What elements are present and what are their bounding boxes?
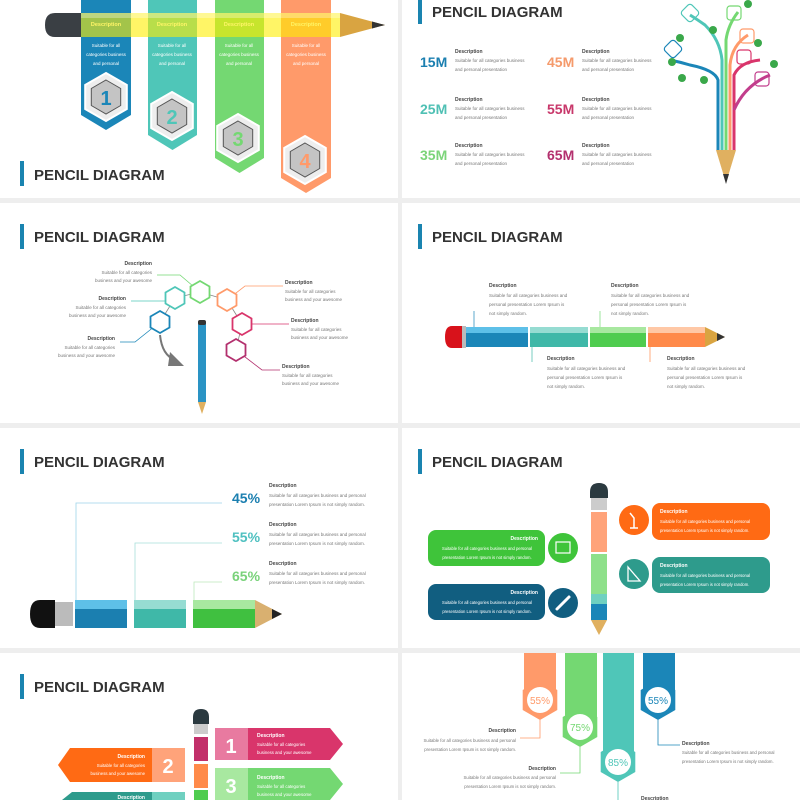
texts panel 8: presentation Lorem Ipsum is not simply random. [682, 759, 774, 764]
texts panel 3: Suitable for all categories [282, 373, 333, 378]
ribbon 3 green [215, 0, 264, 173]
stat 35M: and personal presentation [455, 161, 508, 166]
ribbon 2 teal: categories business [152, 52, 193, 57]
box orange: Description [660, 509, 688, 515]
stat 15M: 15M [420, 54, 447, 70]
pencil horizontal [45, 13, 385, 37]
texts panel 4: Description [547, 356, 575, 362]
ribbon 2 teal: Description [157, 22, 188, 28]
tag 1 pink: business and your awesome [257, 750, 312, 755]
texts panel 8: Suitable for all categories business and personal [682, 750, 774, 755]
texts panel 3: business and your awesome [291, 335, 349, 340]
texts panel 3: business and your awesome [58, 353, 115, 358]
ribbons [524, 653, 675, 752]
stat 25M: and personal presentation [455, 115, 508, 120]
stat 25M [420, 97, 525, 120]
stat 55M: and personal presentation [582, 115, 635, 120]
texts panel 8 [424, 728, 774, 800]
texts panel 3: Description [124, 261, 152, 267]
title panel 5 [20, 449, 165, 474]
title panel 4: PENCIL DIAGRAM [432, 229, 563, 246]
texts panel 4: personal presentation Lorem Ipsum is [611, 302, 687, 307]
texts panel 5: presentation Lorem Ipsum is not simply random. [269, 502, 365, 507]
texts panel 5: presentation Lorem Ipsum is not simply random. [269, 580, 365, 585]
ribbon 4 orange: categories business [286, 52, 327, 57]
vertical blue pencil [198, 320, 206, 414]
ribbon 3 green: Suitable for all [225, 43, 253, 48]
box dark blue: Suitable for all categories business and personal [442, 600, 532, 605]
vertical pencil [193, 709, 209, 800]
hexagon 4: 4 [299, 151, 311, 173]
texts panel 3: business and your awesome [282, 381, 340, 386]
hexagon 2 [151, 92, 193, 140]
texts panel 4: Suitable for all categories business and [667, 366, 746, 371]
ribbon 3 green: and personal [226, 61, 252, 66]
texts panel 4: Description [489, 283, 517, 289]
ribbon 3 green: Description [224, 22, 255, 28]
title panel 4 [418, 224, 563, 249]
texts panel 3: Description [98, 296, 126, 302]
stat 55M: 55M [547, 101, 574, 117]
stat 15M [420, 49, 525, 72]
hexagon 2: 2 [166, 107, 178, 129]
title panel 7: PENCIL DIAGRAM [34, 679, 165, 696]
texts panel 3: Description [285, 280, 313, 286]
texts panel 4: personal presentation Lorem Ipsum is [489, 302, 565, 307]
ribbon 3 green: categories business [219, 52, 260, 57]
box dark blue: Description [510, 590, 538, 596]
hex 85% teal [601, 742, 635, 782]
tag 3 green [215, 768, 343, 800]
ribbon 1 blue: Suitable for all [92, 43, 120, 48]
hex icons [150, 281, 252, 361]
texts panel 4 [489, 283, 746, 389]
box dark blue [428, 584, 545, 620]
stat 65M: Suitable for all categories business [582, 152, 652, 157]
percentages [232, 490, 261, 584]
hexagon 3 [217, 114, 259, 162]
title panel 5: PENCIL DIAGRAM [34, 454, 165, 471]
texts panel 4: personal presentation Lorem Ipsum is [667, 375, 743, 380]
ribbon 1 blue [81, 0, 131, 130]
texts panel 3 [58, 261, 349, 386]
texts panel 5: Description [269, 561, 297, 567]
ribbon 1 blue: and personal [93, 61, 119, 66]
texts panel 4: not simply random. [611, 311, 649, 316]
texts panel 8: Description [682, 741, 710, 747]
texts panel 3: Description [291, 318, 319, 324]
panel 1: ribbons pencil [0, 0, 398, 198]
stat 35M: 35M [420, 147, 447, 163]
hexagon 1 [85, 73, 127, 121]
box teal: presentation Lorem Ipsum is not simply random. [660, 582, 749, 587]
texts panel 5: Suitable for all categories business and personal [269, 532, 366, 537]
hex 55% blue [641, 680, 675, 720]
hex 55% orange [523, 680, 557, 720]
tag 1 pink: Description [257, 733, 285, 739]
tag 4 teal [62, 792, 185, 800]
title panel 1: PENCIL DIAGRAM [34, 167, 165, 184]
texts panel 3: Suitable for all categories [291, 327, 342, 332]
box orange: Suitable for all categories business and personal [660, 519, 750, 524]
icon circles [548, 505, 649, 618]
box green: presentation Lorem Ipsum is not simply random. [442, 555, 532, 560]
ribbon 2 teal: and personal [159, 61, 185, 66]
stat 45M: and personal presentation [582, 67, 635, 72]
hexagon 4 [284, 136, 326, 184]
hex 75% green [563, 707, 597, 747]
box teal: Suitable for all categories business and personal [660, 573, 750, 578]
panel 7: numbered arrow tags [0, 653, 398, 800]
ribbon 4 orange: and personal [293, 61, 319, 66]
texts panel 8: presentation Lorem Ipsum is not simply random. [424, 747, 516, 752]
panel 8: hanging hexagon percentages [402, 653, 800, 800]
percentages: 65% [232, 568, 261, 584]
panel 3: hexagon chain [0, 203, 398, 423]
ribbon 4 orange: Suitable for all [292, 43, 320, 48]
texts panel 5: Suitable for all categories business and personal [269, 571, 366, 576]
stat 15M: Description [455, 49, 483, 55]
box green [428, 530, 545, 566]
stat 25M: 25M [420, 101, 447, 117]
stat 45M: Description [582, 49, 610, 55]
vertical pencil [590, 483, 608, 635]
stat 45M [547, 49, 652, 72]
hexagon 3: 3 [232, 129, 244, 151]
title panel 7 [20, 674, 165, 699]
stat 35M: Description [455, 143, 483, 149]
texts panel 3: Suitable for all categories [75, 305, 127, 310]
tag 3 green: Suitable for all categories [257, 784, 305, 789]
percentages: 45% [232, 490, 261, 506]
texts panel 5: Description [269, 522, 297, 528]
stat 65M: and personal presentation [582, 161, 635, 166]
texts panel 4: Suitable for all categories business and [547, 366, 626, 371]
box green: Suitable for all categories business and personal [442, 546, 532, 551]
texts panel 3: Description [87, 336, 115, 342]
stat 65M: Description [582, 143, 610, 149]
tag 1 pink: Suitable for all categories [257, 742, 305, 747]
texts panel 4: personal presentation Lorem Ipsum is [547, 375, 623, 380]
leader lines [520, 720, 680, 800]
tag 3 green: 3 [225, 776, 237, 798]
texts panel 8: Suitable for all categories business and personal [424, 738, 516, 743]
texts panel 3: business and your awesome [69, 313, 126, 318]
leader lines [76, 503, 222, 600]
curved arrow [160, 335, 184, 366]
panel 5: percentage pencil [0, 428, 398, 648]
title panel 2 [418, 0, 563, 24]
pencil [30, 600, 282, 628]
stat 25M: Description [455, 97, 483, 103]
texts panel 4: not simply random. [489, 311, 527, 316]
ribbon 4 orange [281, 0, 331, 193]
tag 2 orange [58, 748, 185, 782]
tag 1 pink: 1 [225, 736, 237, 758]
title panel 3 [20, 224, 165, 249]
tree pencil [663, 0, 778, 184]
stat 55M: Suitable for all categories business [582, 106, 652, 111]
stat 35M [420, 143, 525, 166]
tag 2 orange: Description [117, 754, 145, 760]
texts panel 4: Suitable for all categories business and [489, 293, 568, 298]
stat 15M: and personal presentation [455, 67, 508, 72]
box orange: presentation Lorem Ipsum is not simply random. [660, 528, 749, 533]
ribbon 1 blue: categories business [86, 52, 127, 57]
pencil [445, 326, 725, 348]
texts panel 5: Description [269, 483, 297, 489]
stat 55M: Description [582, 97, 610, 103]
tag 2 orange: 2 [162, 756, 174, 778]
texts panel 4: not simply random. [547, 384, 585, 389]
box dark blue: presentation Lorem Ipsum is not simply random. [442, 609, 532, 614]
texts panel 3: business and your awesome [285, 297, 343, 302]
stat 65M: 65M [547, 147, 574, 163]
box orange [652, 503, 770, 540]
texts panel 4: Suitable for all categories business and [611, 293, 690, 298]
title panel 6: PENCIL DIAGRAM [432, 454, 563, 471]
connector lines [120, 275, 289, 370]
box green: Description [510, 536, 538, 542]
panel 2: stats and tree [402, 0, 800, 198]
hex 75% green: 75% [570, 723, 590, 734]
percentages: 55% [232, 529, 261, 545]
hex 55% blue: 55% [648, 696, 668, 707]
title panel 1 [20, 161, 165, 186]
texts panel 3: Description [282, 364, 310, 370]
panel 4: horizontal pencil timeline [402, 203, 800, 423]
hex 55% orange: 55% [530, 696, 550, 707]
texts panel 4: Description [667, 356, 695, 362]
stat 35M: Suitable for all categories business [455, 152, 525, 157]
stat 15M: Suitable for all categories business [455, 58, 525, 63]
title panel 6 [418, 449, 563, 474]
texts panel 8: presentation Lorem Ipsum is not simply random. [464, 784, 556, 789]
title panel 3: PENCIL DIAGRAM [34, 229, 165, 246]
texts panel 3: Suitable for all categories [64, 345, 116, 350]
texts panel 3: Suitable for all categories [285, 289, 336, 294]
stat 45M: 45M [547, 54, 574, 70]
panel 6: vertical pencil with boxes [402, 428, 800, 648]
tag 2 orange: Suitable for all categories [97, 763, 145, 768]
stat 55M [547, 97, 652, 120]
hex 85% teal: 85% [608, 758, 628, 769]
title panel 2: PENCIL DIAGRAM [432, 4, 563, 21]
tag 3 green: business and your awesome [257, 792, 312, 797]
tag 2 orange: business and your awesome [91, 771, 146, 776]
texts panel 4: not simply random. [667, 384, 705, 389]
texts panel 3: business and your awesome [95, 278, 152, 283]
tag 1 pink [215, 728, 343, 760]
texts panel 8: Description [528, 766, 556, 772]
ribbon 2 teal [148, 0, 197, 150]
stat 25M: Suitable for all categories business [455, 106, 525, 111]
texts panel 5: Suitable for all categories business and personal [269, 493, 366, 498]
tag 3 green: Description [257, 775, 285, 781]
ribbon 1 blue: Description [91, 22, 122, 28]
texts panel 5: presentation Lorem Ipsum is not simply random. [269, 541, 365, 546]
box teal [652, 557, 770, 593]
texts panel 8: Suitable for all categories business and personal [464, 775, 556, 780]
connectors [474, 311, 650, 362]
box teal: Description [660, 563, 688, 569]
ribbon 4 orange: Description [291, 22, 322, 28]
hexagon 1: 1 [100, 88, 112, 110]
stat 65M [547, 143, 652, 166]
stat 45M: Suitable for all categories business [582, 58, 652, 63]
texts panel 5 [269, 483, 366, 585]
texts panel 4: Description [611, 283, 639, 289]
ribbon 2 teal: Suitable for all [158, 43, 186, 48]
texts panel 8: Description [488, 728, 516, 734]
texts panel 3: Suitable for all categories [101, 270, 153, 275]
